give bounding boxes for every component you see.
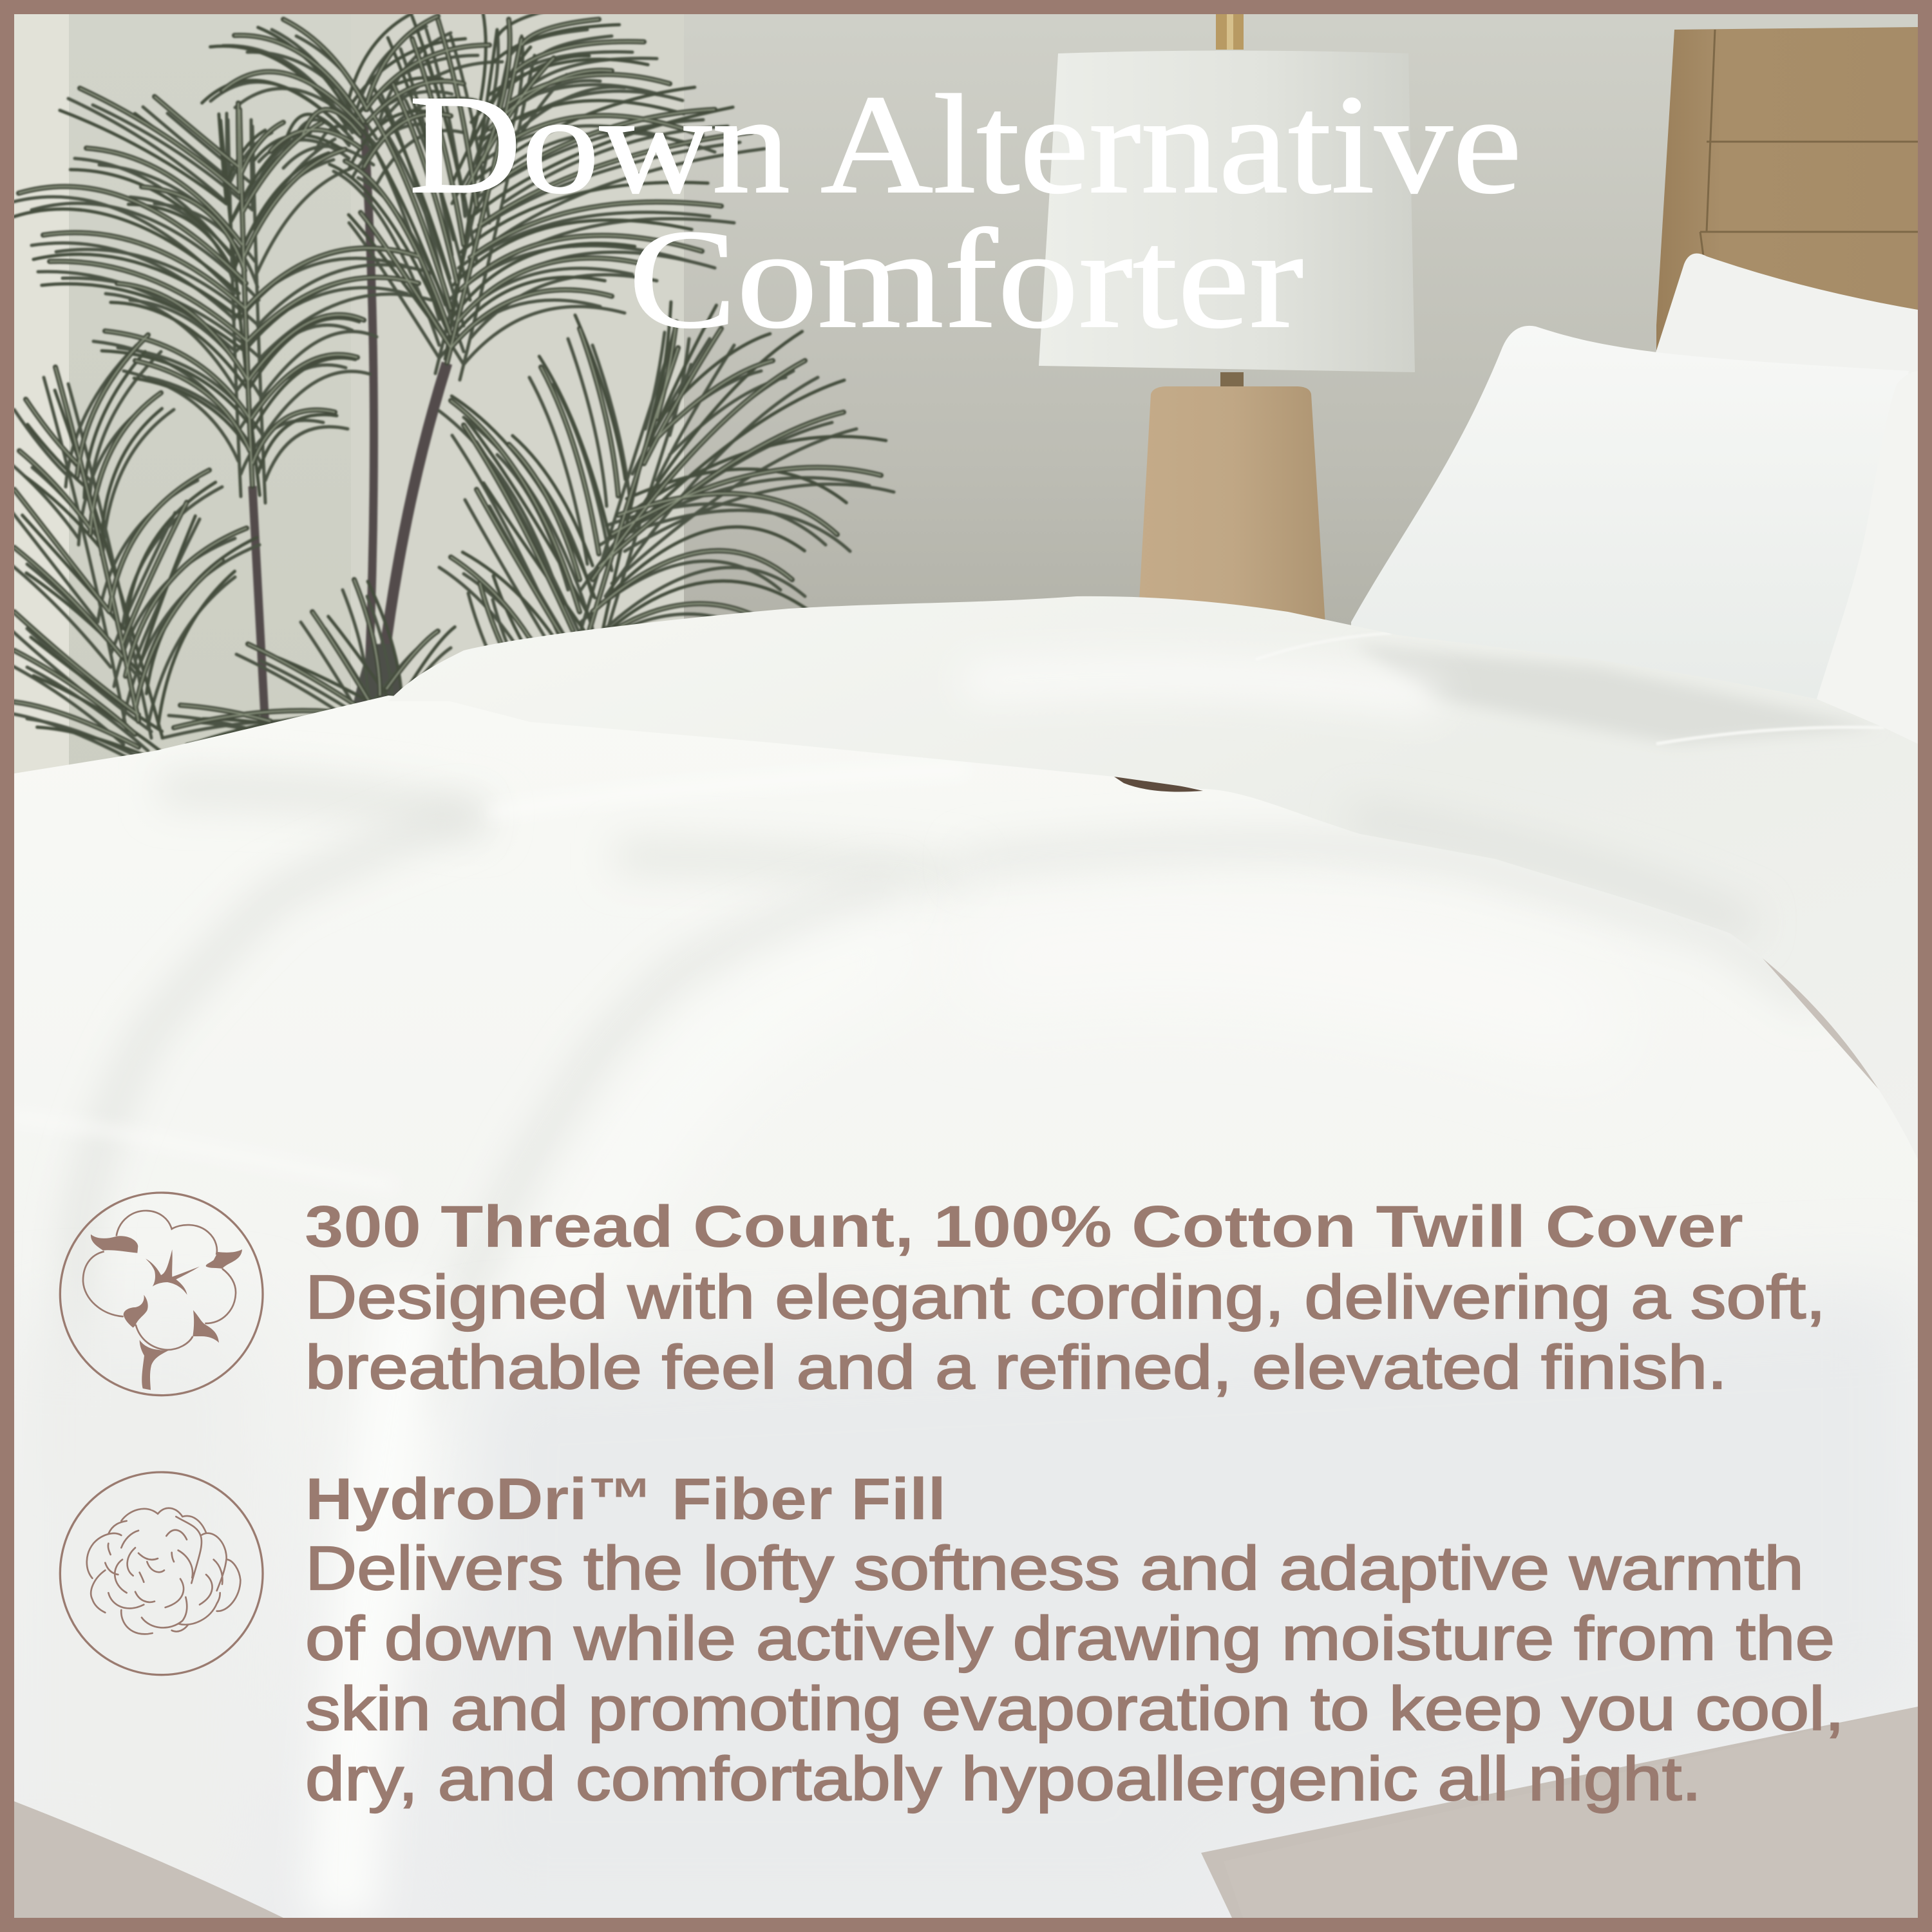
title (409, 66, 1522, 357)
text block: cotton cover (305, 1194, 1826, 1402)
text block: cotton cover: breathable feel and a refined, elevated finish. (305, 1333, 1727, 1402)
title: Comforter (629, 200, 1303, 357)
text block: hydrodri fill: dry, and comfortably hypoallergenic all night. (305, 1745, 1701, 1814)
headboard (1656, 27, 1918, 386)
icon: cotton boll (60, 1193, 263, 1396)
table lamp (1039, 14, 1415, 625)
icon: plant (0, 0, 905, 772)
text block: cotton cover: Designed with elegant cording, delivering a soft, (305, 1263, 1826, 1332)
pillows (1351, 254, 1918, 837)
comforter: upper fold (388, 596, 1918, 1159)
text block: hydrodri fill: Delivers the lofty softness and adaptive warmth (305, 1534, 1804, 1603)
text block: hydrodri fill: of down while actively drawing moisture from the (305, 1604, 1835, 1673)
title: Down Alternative (409, 66, 1522, 223)
text block: hydrodri fill (305, 1466, 1844, 1814)
comforter: lower body (12, 696, 1918, 1918)
text block: hydrodri fill: HydroDri™ Fiber Fill (305, 1466, 946, 1532)
text block: cotton cover: 300 Thread Count, 100% Cotton Twill Cover (305, 1194, 1743, 1260)
text block: hydrodri fill: skin and promoting evaporation to keep you cool, (305, 1674, 1844, 1743)
icon: fiber fill (60, 1472, 263, 1675)
